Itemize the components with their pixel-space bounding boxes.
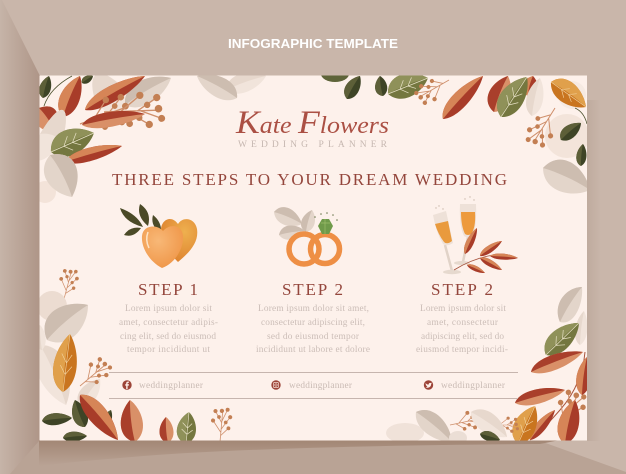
card panel	[40, 76, 587, 440]
step 2 body text: incididunt ut labore et dolore	[256, 345, 370, 355]
icon: facebook	[122, 380, 132, 390]
step 3 body text	[416, 304, 508, 355]
step 3 body text: eiusmod tempor incidi-	[416, 345, 508, 355]
logo script name: Kate Flowers	[235, 105, 389, 141]
step 2 heading: STEP 2	[282, 280, 343, 299]
step 1 body text: tempor incididunt ut	[127, 345, 210, 355]
step 1 body text: cing elit, sed do eiusmod	[120, 332, 216, 342]
step 3 body text: Lorem ipsum dolor sit	[420, 304, 506, 314]
icon: twitter	[424, 380, 433, 390]
step 3 heading: STEP 2	[431, 280, 493, 299]
step 3 body text: amet, consectetur	[427, 318, 499, 328]
facebook handle: weddingplanner	[139, 381, 204, 391]
step 1	[119, 280, 218, 355]
twitter handle: weddingplanner	[441, 381, 506, 391]
step 1 body text	[119, 304, 218, 355]
logo	[235, 105, 389, 150]
step 2 body text: Lorem ipsum dolor sit amet,	[258, 304, 369, 314]
top banner heading: INFOGRAPHIC TEMPLATE	[228, 36, 398, 51]
icon: wedding rings	[271, 203, 340, 264]
icon: instagram	[271, 380, 281, 390]
floral decoration: top right	[321, 76, 587, 194]
floral decoration: bottom left	[40, 269, 232, 440]
floral decoration: top centre	[197, 76, 266, 100]
step 2 body text	[256, 304, 370, 355]
step 1 heading: STEP 1	[138, 280, 198, 299]
step 3 body text: adipiscing elit, sed do	[421, 332, 504, 342]
main heading: THREE STEPS TO YOUR DREAM WEDDING	[112, 170, 507, 189]
logo subtitle: WEDDING PLANNER	[238, 140, 388, 150]
icon: hearts with leaves	[120, 204, 197, 268]
floral decoration: bottom right	[386, 287, 587, 440]
step 3	[416, 280, 508, 355]
step 2	[256, 280, 370, 355]
step 2 body text: sed do eiusmod tempor	[267, 332, 360, 342]
icon: champagne glasses with branch	[433, 196, 519, 275]
instagram handle: weddingplanner	[289, 381, 353, 391]
floral decoration: top left	[40, 76, 171, 203]
step 2 body text: consectetur adipiscing elit,	[261, 318, 365, 328]
step 1 body text: Lorem ipsum dolor sit	[125, 304, 212, 314]
social bar	[109, 372, 518, 399]
step 1 body text: amet, consectetur adipis-	[119, 318, 218, 328]
